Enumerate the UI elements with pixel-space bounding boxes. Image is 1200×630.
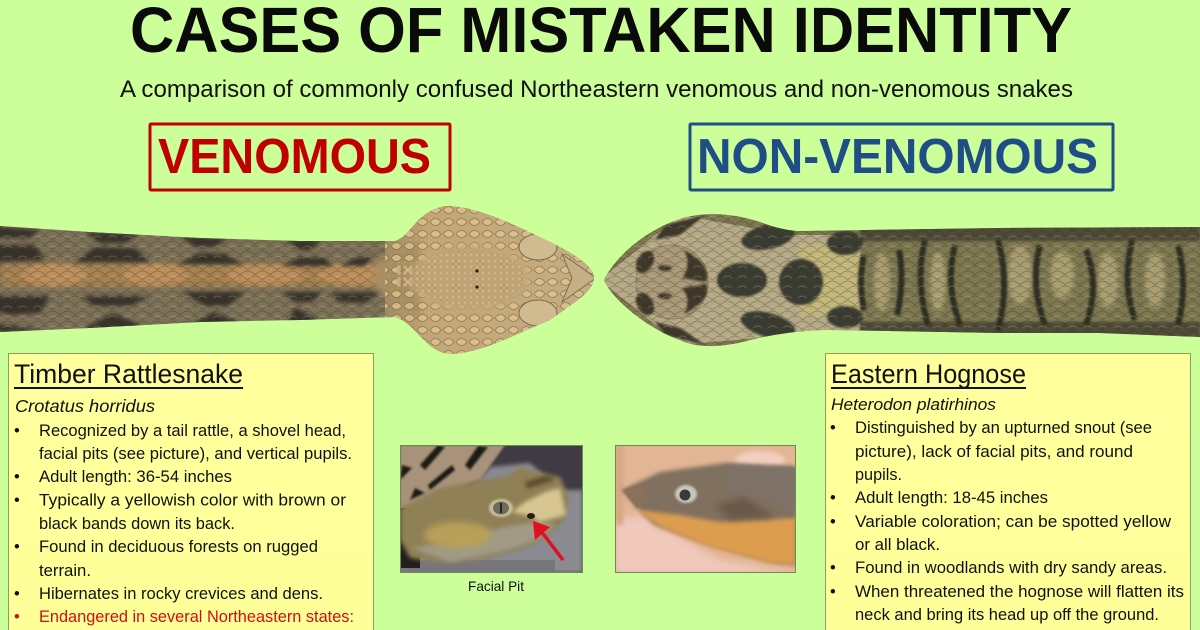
bullet list: hognose facts: • — [830, 513, 836, 531]
bullet list: rattlesnake facts: Recognized by a tail rattle, a shovel head, — [39, 422, 346, 440]
scientific name: Heterodon platirhinos — [831, 395, 997, 414]
panel heading: timber rattlesnake: Timber Rattlesnake — [14, 359, 243, 389]
bullet list: hognose facts — [830, 419, 1184, 624]
bullet list: hognose facts: • — [830, 559, 836, 577]
bullet list: hognose facts: • — [830, 489, 836, 507]
panel heading: eastern hognose: Eastern Hognose — [831, 359, 1026, 389]
bullet list: rattlesnake facts: • — [14, 422, 20, 440]
bullet list: hognose facts: or all black. — [855, 536, 940, 554]
panel: eastern hognose — [826, 354, 1190, 630]
bullet list: hognose facts: Adult length: 18-45 inches — [855, 489, 1048, 507]
bullet list: rattlesnake facts — [14, 422, 354, 626]
bullet list: rattlesnake facts: • — [14, 492, 20, 510]
bullet list: rattlesnake facts: black bands down its back. — [39, 515, 235, 533]
bullet list: rattlesnake facts: Hibernates in rocky crevices and dens. — [39, 585, 323, 603]
panel: timber rattlesnake — [8, 354, 374, 630]
bullet list: hognose facts: neck and bring its head up off the ground. — [855, 606, 1159, 624]
bullet list: rattlesnake facts: Endangered in several Northeastern states: — [39, 608, 354, 626]
scientific name: Crotatus horridus — [15, 396, 155, 416]
snake illustration: eastern hognose — [604, 214, 1200, 346]
heading: venomous: VENOMOUS — [158, 130, 431, 184]
bullet list: rattlesnake facts: Adult length: 36-54 inches — [39, 468, 232, 486]
photo: rattlesnake head with facial pit arrow — [400, 445, 583, 573]
bullet list: rattlesnake facts: terrain. — [39, 562, 91, 580]
bullet list: rattlesnake facts: Typically a yellowish color with brown or — [39, 492, 347, 510]
bullet list: rattlesnake facts: Found in deciduous forests on rugged — [39, 538, 318, 556]
bullet list: rattlesnake facts: • — [14, 585, 20, 603]
bullet list: rattlesnake facts: facial pits (see picture), and vertical pupils. — [39, 445, 352, 463]
heading: non-venomous: NON-VENOMOUS — [697, 130, 1098, 184]
bullet list: hognose facts: Distinguished by an upturned snout (see — [855, 419, 1152, 437]
bullet list: hognose facts: • — [830, 583, 836, 601]
caption: facial pit: Facial Pit — [468, 578, 524, 594]
bullet list: rattlesnake facts: • — [14, 538, 20, 556]
bullet list: hognose facts: When threatened the hognose will flatten its — [855, 583, 1184, 601]
photo: hognose head — [615, 445, 796, 573]
subtitle: A comparison of commonly confused Northeastern venomous and non-venomous snakes — [120, 76, 1073, 103]
bullet list: hognose facts: picture), lack of facial pits, and round — [855, 443, 1133, 461]
bullet list: rattlesnake facts: • — [14, 608, 20, 626]
bullet list: hognose facts: • — [830, 419, 836, 437]
snake illustration: timber rattlesnake — [0, 200, 600, 360]
bullet list: rattlesnake facts: • — [14, 468, 20, 486]
bullet list: hognose facts: pupils. — [855, 466, 902, 484]
arrow: facial pit pointer — [533, 521, 563, 560]
bullet list: hognose facts: Found in woodlands with dry sandy areas. — [855, 559, 1167, 577]
bullet list: hognose facts: Variable coloration; can be spotted yellow — [855, 513, 1171, 531]
